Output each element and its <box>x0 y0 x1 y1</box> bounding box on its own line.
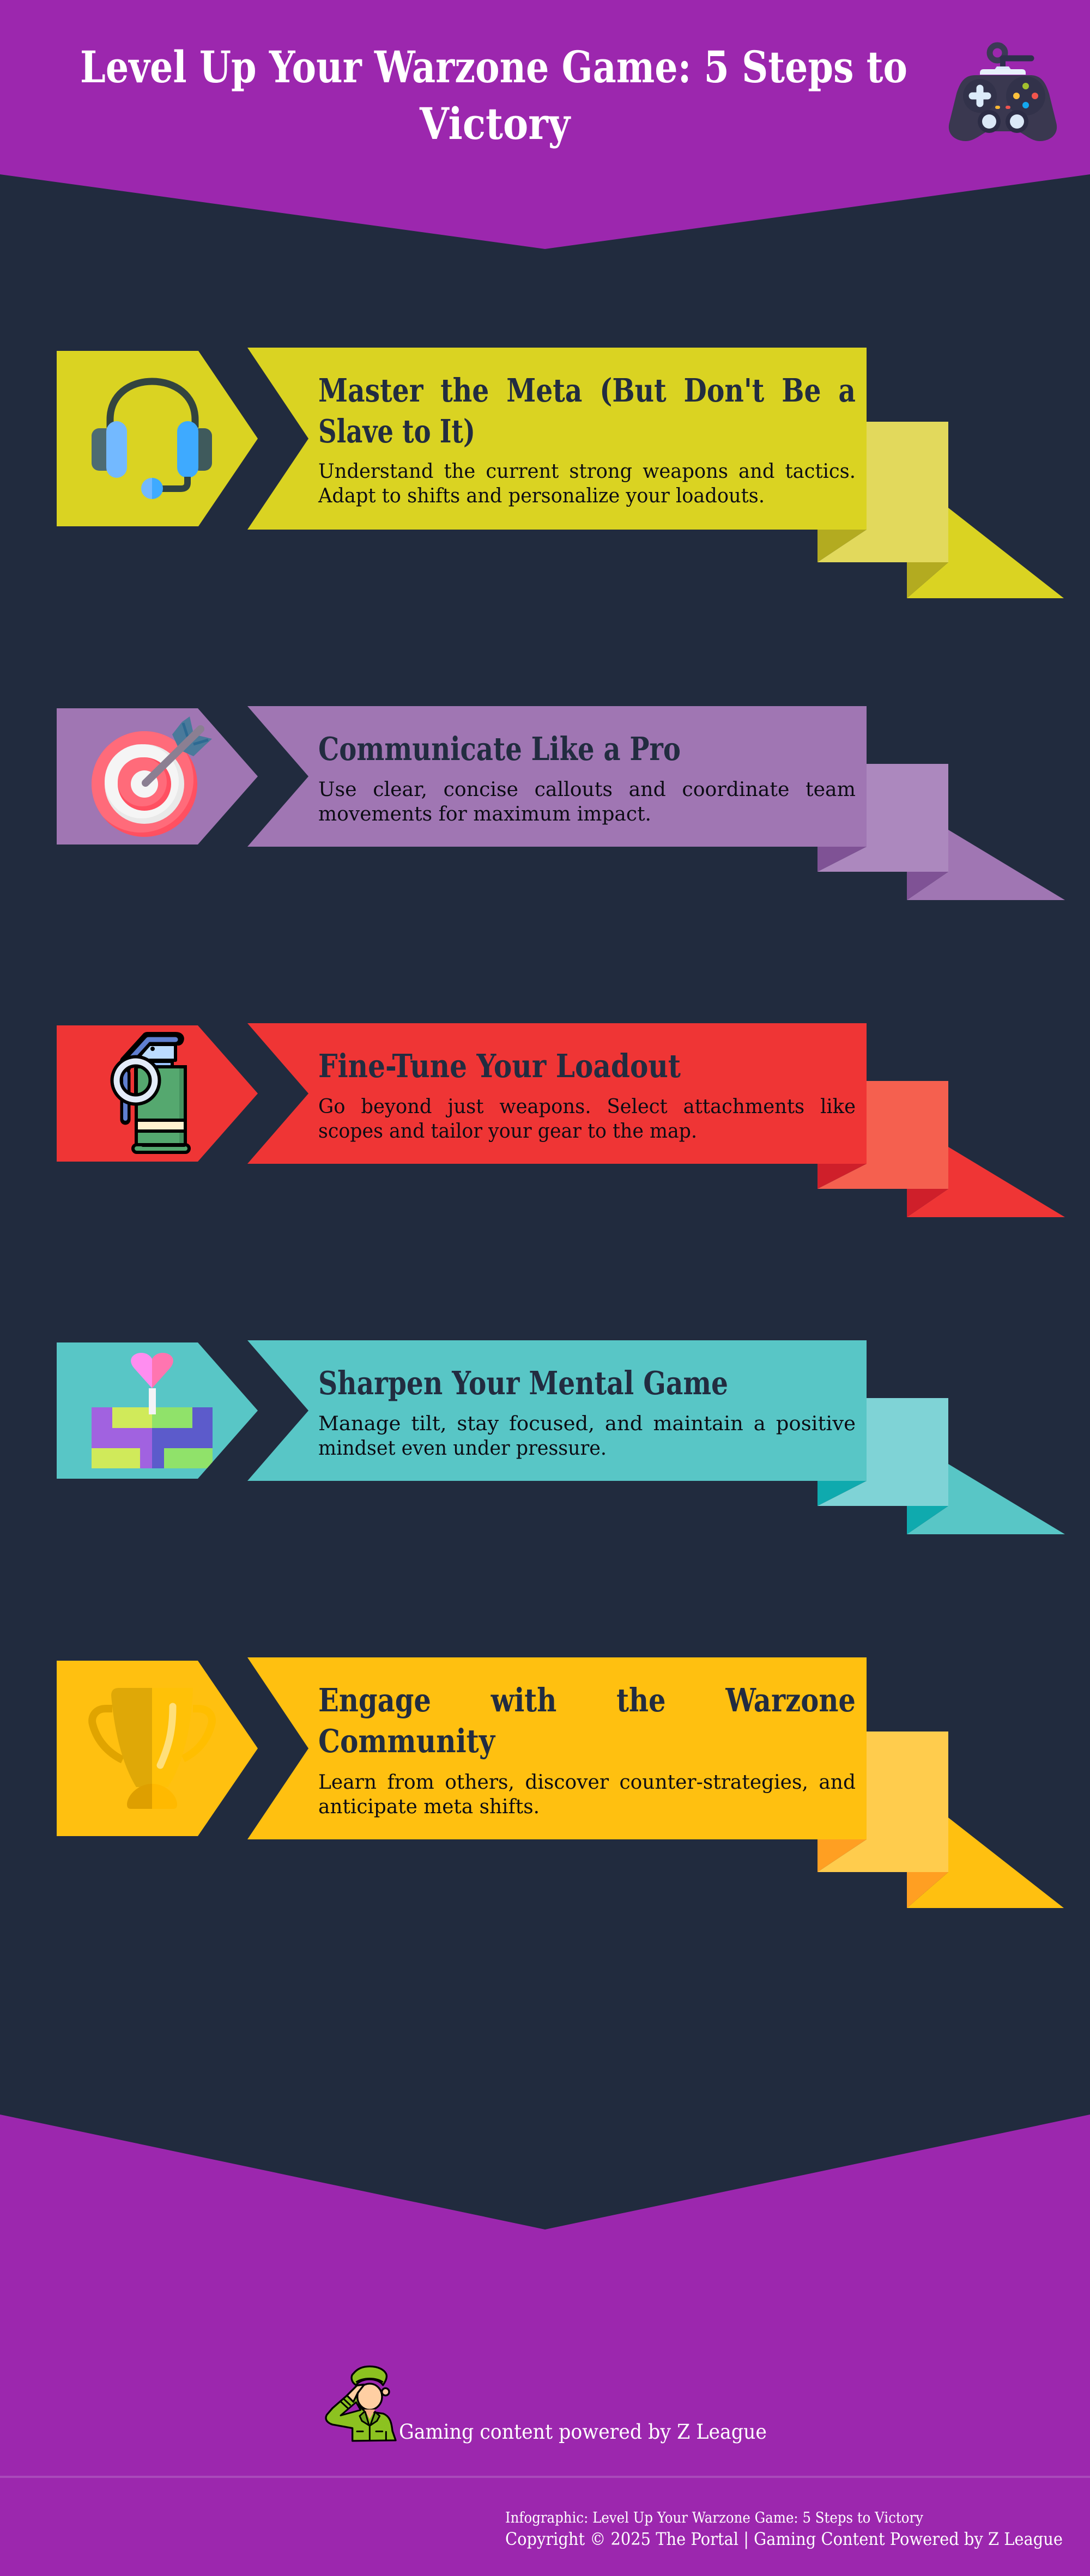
footer tagline: Gaming content powered by Z League <box>399 2420 767 2444</box>
step 2 chevron <box>57 708 258 845</box>
icon: saluting soldier <box>326 2366 396 2441</box>
step 5 ribbon <box>247 1657 1064 1908</box>
step 3 body text: Go beyond just weapons. Select attachments like <box>318 1096 856 1118</box>
step 5 heading: Engage with the Warzone <box>318 1681 856 1719</box>
step 4 card: Sharpen Your Mental Game <box>57 1340 1065 1534</box>
step 3 card: Fine-Tune Your Loadout <box>57 1023 1065 1217</box>
step 5 card: Engage with the Warzone Community <box>57 1657 1064 1908</box>
step 2 body text <box>318 779 856 825</box>
step 5 body text: Learn from others, discover counter-strategies, and <box>318 1771 856 1794</box>
step 3 chevron <box>57 1025 258 1162</box>
footer credits: Infographic: Level Up Your Warzone Game: 5 Steps to Victory <box>505 2510 924 2526</box>
step 2 body text: Use clear, concise callouts and coordinate team <box>318 779 856 801</box>
icon: game controller <box>949 45 1057 141</box>
step 2 card: Communicate Like a Pro <box>57 706 1065 900</box>
step 4 body text: Manage tilt, stay focused, and maintain a positive <box>318 1413 856 1435</box>
title <box>80 41 907 149</box>
step 5 body text <box>318 1771 856 1818</box>
step 3 ribbon <box>247 1023 1065 1217</box>
step 2 heading: Communicate Like a Pro <box>318 730 681 768</box>
step 4 chevron <box>57 1342 258 1479</box>
step 1 heading: Slave to It) <box>318 412 475 450</box>
step 4 body text <box>318 1413 856 1460</box>
step 5 chevron <box>57 1661 258 1836</box>
step 1 heading <box>318 372 856 450</box>
step 1 card: Master the Meta <box>57 348 1064 598</box>
icon: grenade <box>117 1037 189 1152</box>
icon: trophy <box>92 1688 212 1809</box>
footer banner <box>0 2115 1090 2576</box>
icon: gift with heart <box>92 1353 213 1468</box>
step 1 body text <box>318 460 856 507</box>
icon: target with arrow <box>88 716 212 837</box>
step 4 ribbon <box>247 1340 1065 1534</box>
step 3 body text <box>318 1096 856 1143</box>
step 3 heading: Fine-Tune Your Loadout <box>318 1047 681 1085</box>
step 2 ribbon <box>247 706 1065 900</box>
step 1 body text: Adapt to shifts and personalize your loadouts. <box>318 485 765 507</box>
footer credits <box>505 2510 1063 2549</box>
step 1 heading: Master the Meta (But Don't Be a <box>318 372 856 409</box>
step 1 body text: Understand the current strong weapons and tactics. <box>318 460 856 483</box>
title: Level Up Your Warzone Game: 5 Steps to <box>80 41 907 93</box>
step 1 ribbon <box>247 348 1064 598</box>
step 2 body text: movements for maximum impact. <box>318 803 651 825</box>
step 4 body text: mindset even under pressure. <box>318 1437 607 1460</box>
icon: headset <box>92 381 212 499</box>
title: Victory <box>419 98 571 149</box>
step 3 body text: scopes and tailor your gear to the map. <box>318 1120 697 1143</box>
step 5 body text: anticipate meta shifts. <box>318 1796 540 1818</box>
step 1 chevron <box>57 351 258 526</box>
header banner <box>0 0 1090 249</box>
step 5 heading: Community <box>318 1722 495 1760</box>
step 4 heading: Sharpen Your Mental Game <box>318 1364 728 1402</box>
step 5 heading <box>318 1681 856 1760</box>
